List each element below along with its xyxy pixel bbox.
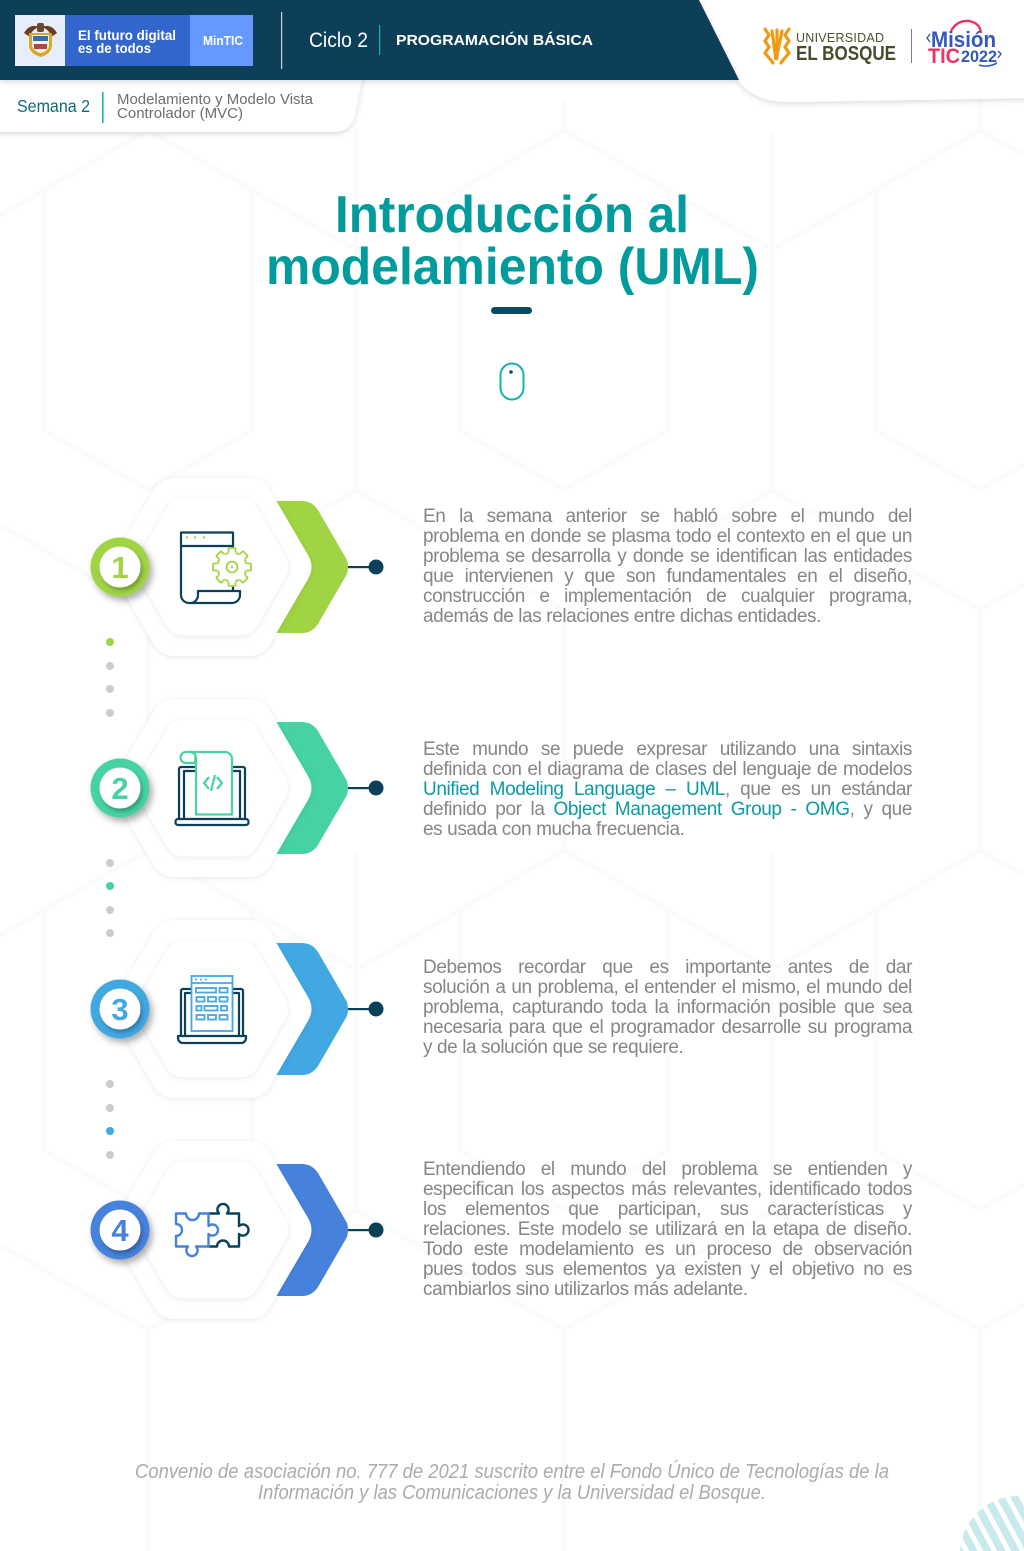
inner hexagon bbox=[136, 1162, 288, 1298]
footer credit: Información y las Comunicaciones y la Universidad el Bosque. bbox=[258, 1482, 766, 1504]
text: step 1: además de las relaciones entre dichas entidades. bbox=[423, 606, 821, 627]
title: modelamiento (UML) bbox=[266, 238, 759, 296]
program: PROGRAMACIÓN BÁSICA bbox=[396, 31, 593, 49]
text: step 1: que intervienen y que son fundamentales en el diseño, bbox=[423, 566, 912, 587]
chevron bbox=[265, 501, 348, 633]
text: step 4 bbox=[423, 1159, 912, 1300]
connector bbox=[348, 1002, 384, 1016]
chevron bbox=[265, 943, 348, 1075]
semana label: Semana 2 bbox=[17, 96, 90, 116]
logo tab bbox=[690, 0, 1024, 102]
inner hexagon bbox=[136, 940, 288, 1078]
text: step 2: definido por la Object Management Group - OMG, y que bbox=[423, 799, 912, 820]
text: step 4: Todo este modelamiento es un proceso de observación bbox=[423, 1239, 912, 1260]
text: step 3: Debemos recordar que es importante antes de dar bbox=[423, 957, 912, 978]
title: Introducción al bbox=[335, 186, 689, 244]
connector bbox=[348, 560, 384, 574]
text: step 4: los elementos que participan, sus características y bbox=[423, 1199, 912, 1220]
chevron bbox=[265, 722, 348, 854]
slogan: El futuro digital bbox=[78, 28, 176, 43]
slogan: es de todos bbox=[78, 41, 151, 56]
week topic: Modelamiento y Modelo Vista bbox=[117, 91, 314, 108]
logo: universidad el bosque: EL BOSQUE bbox=[796, 42, 896, 65]
text: step 3: y de la solución que se requiere. bbox=[423, 1037, 683, 1058]
text: step 4: pues todos sus elementos ya existen y el objetivo no es bbox=[423, 1259, 912, 1280]
icon: mouse bbox=[500, 364, 524, 400]
cycle: Ciclo 2 bbox=[309, 29, 368, 52]
text: step 4: cambiarlos sino utilizarlos más adelante. bbox=[423, 1279, 748, 1300]
text: step 2: Unified Modeling Language – UML, que es un estándar bbox=[423, 779, 912, 800]
inner hexagon bbox=[136, 498, 288, 636]
outer hexagon bbox=[112, 1141, 312, 1319]
step 2 bbox=[90, 699, 384, 877]
logo: universidad el bosque bbox=[765, 29, 896, 65]
text: step 1: En la semana anterior se habló sobre el mundo del bbox=[423, 506, 912, 527]
footer credit: Convenio de asociación no. 777 de 2021 suscrito entre el Fondo Único de Tecnologías de la bbox=[135, 1460, 889, 1483]
text: step 4: especifican los aspectos más relevantes, identificado todos bbox=[423, 1179, 912, 1200]
number badge: 4 bbox=[111, 1213, 129, 1248]
logo: mision tic: 2022 bbox=[961, 48, 997, 66]
week topic: Controlador (MVC) bbox=[117, 105, 243, 122]
logo: mision tic bbox=[927, 21, 1001, 68]
chevron bbox=[265, 1164, 348, 1296]
icon: coat of arms bbox=[24, 23, 57, 57]
step 3 bbox=[90, 920, 384, 1098]
text: step 1: problema se desarrolla y donde se identifican las entidades bbox=[423, 546, 912, 567]
icon: document with gear bbox=[181, 532, 251, 603]
outer hexagon bbox=[112, 920, 312, 1098]
header bar bbox=[0, 0, 739, 80]
number badge bbox=[90, 758, 150, 818]
text: step 3 bbox=[423, 957, 912, 1058]
text: step 1: construcción e implementación de cualquier programa, bbox=[423, 586, 912, 607]
progress dots 1 bbox=[106, 638, 114, 717]
text: step 4: Entendiendo el mundo del problema se entienden y bbox=[423, 1159, 912, 1180]
decorative striped circle bbox=[960, 1496, 1024, 1551]
inner hexagon bbox=[136, 720, 288, 856]
government logo bbox=[15, 15, 253, 66]
connector bbox=[348, 780, 384, 796]
step 4 bbox=[90, 1141, 384, 1319]
text: step 2 bbox=[423, 739, 912, 840]
outer hexagon bbox=[112, 699, 312, 877]
text: step 1 bbox=[423, 506, 912, 627]
number badge: 1 bbox=[111, 550, 129, 585]
semana tab bbox=[0, 70, 364, 132]
text: step 2: Este mundo se puede expresar utilizando una sintaxis bbox=[423, 739, 912, 760]
step 1 bbox=[90, 478, 384, 656]
text: step 1: problema en donde se plasma todo el contexto en el que un bbox=[423, 526, 912, 547]
text: step 3: problema, capturando toda la información posible que sea bbox=[423, 997, 912, 1018]
number badge: 3 bbox=[111, 992, 129, 1027]
text: step 2: es usada con mucha frecuencia. bbox=[423, 819, 685, 840]
logo: mision tic: TIC bbox=[928, 45, 960, 68]
logo: mision tic: Misión bbox=[931, 27, 996, 52]
icon: laptop with code sheet bbox=[176, 752, 248, 825]
title underline bbox=[491, 307, 532, 314]
text: step 3: solución a un problema, el entender el mismo, el mundo del bbox=[423, 977, 912, 998]
number badge bbox=[90, 538, 150, 596]
icon: laptop with table window bbox=[178, 976, 246, 1043]
number badge bbox=[90, 1200, 150, 1260]
text: step 3: necesaria para que el programador desarrolle su programa bbox=[423, 1017, 912, 1038]
text: step 2: definida con el diagrama de clases del lenguaje de modelos bbox=[423, 759, 912, 780]
logo: universidad el bosque: UNIVERSIDAD bbox=[796, 31, 884, 45]
connector bbox=[348, 1222, 384, 1238]
text: step 4: relaciones. Este modelo se utilizará en la etapa de diseño. bbox=[423, 1219, 912, 1240]
icon: emblem bbox=[765, 29, 789, 63]
progress dots 3 bbox=[106, 1080, 114, 1159]
mintic: MinTIC bbox=[203, 34, 243, 48]
icon: puzzle pieces bbox=[176, 1204, 249, 1256]
progress dots 2 bbox=[106, 859, 114, 937]
semana divider bbox=[102, 92, 104, 123]
number badge bbox=[90, 980, 150, 1038]
outer hexagon bbox=[112, 478, 312, 656]
number badge: 2 bbox=[111, 771, 129, 806]
